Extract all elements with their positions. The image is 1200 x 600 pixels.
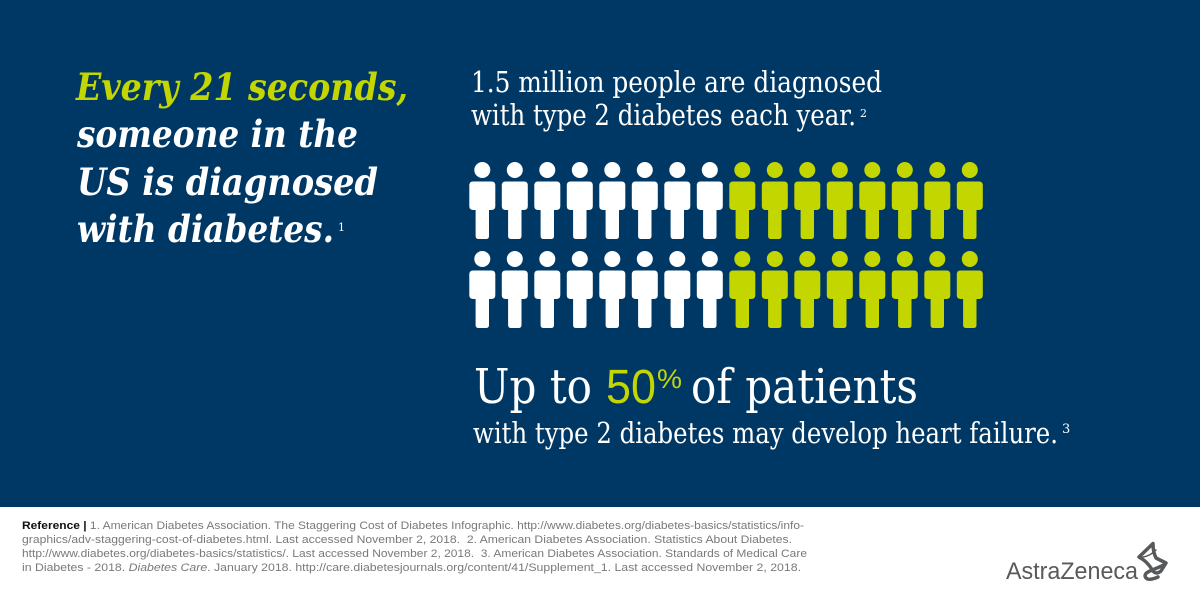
heading: every 21 seconds: someone in the xyxy=(76,112,358,156)
references: in Diabetes - 2018. Diabetes Care . January 2018. http://care.diabetesjournals.org/content/41/Supplement_1. Last accessed November 2, 2018. xyxy=(22,562,801,574)
pictogram: people rows xyxy=(469,162,983,328)
text: 1.5 million diagnosed: 1.5 million people are diagnosed xyxy=(471,65,882,99)
statistic: up to 50% of patients: Up to xyxy=(474,359,592,415)
text: 1.5 million diagnosed xyxy=(471,65,882,132)
references: graphics/adv-staggering-cost-of-diabetes.html. Last accessed November 2, 2018. 2. American Diabetes Association. Statistics About Diabetes. xyxy=(22,534,792,546)
references xyxy=(22,520,807,574)
heading: every 21 seconds: 1 xyxy=(338,221,345,234)
icon: AstraZeneca symbol xyxy=(1139,544,1166,579)
statistic: up to 50% of patients: % xyxy=(657,364,682,394)
text: 1.5 million diagnosed: 2 xyxy=(860,107,867,120)
heading: every 21 seconds: US is diagnosed xyxy=(77,160,378,204)
references: http://www.diabetes.org/diabetes-basics/statistics/. Last accessed November 2, 2018. 3. American Diabetes Association. Standards of Medical Care xyxy=(22,548,807,560)
heading: every 21 seconds xyxy=(75,65,408,251)
statistic: up to 50% of patients xyxy=(474,359,918,415)
statistic: up to 50% of patients: of patients xyxy=(691,359,918,415)
text: 1.5 million diagnosed: with type 2 diabetes each year. xyxy=(471,98,856,132)
logo: AstraZeneca: AstraZeneca xyxy=(1006,558,1139,585)
heading: every 21 seconds: with diabetes. xyxy=(77,207,334,251)
heading: every 21 seconds: Every 21 seconds, xyxy=(75,65,408,109)
text: heart failure: 3 xyxy=(1062,422,1070,437)
logo: AstraZeneca xyxy=(1006,544,1166,585)
statistic: up to 50% of patients: 50 xyxy=(606,361,656,414)
references: Reference | 1. American Diabetes Association. The Staggering Cost of Diabetes Infographic. http://www.diabetes.org/diabetes-basics/statistics/info- xyxy=(22,520,804,532)
text: heart failure: with type 2 diabetes may develop heart failure. xyxy=(473,416,1058,450)
